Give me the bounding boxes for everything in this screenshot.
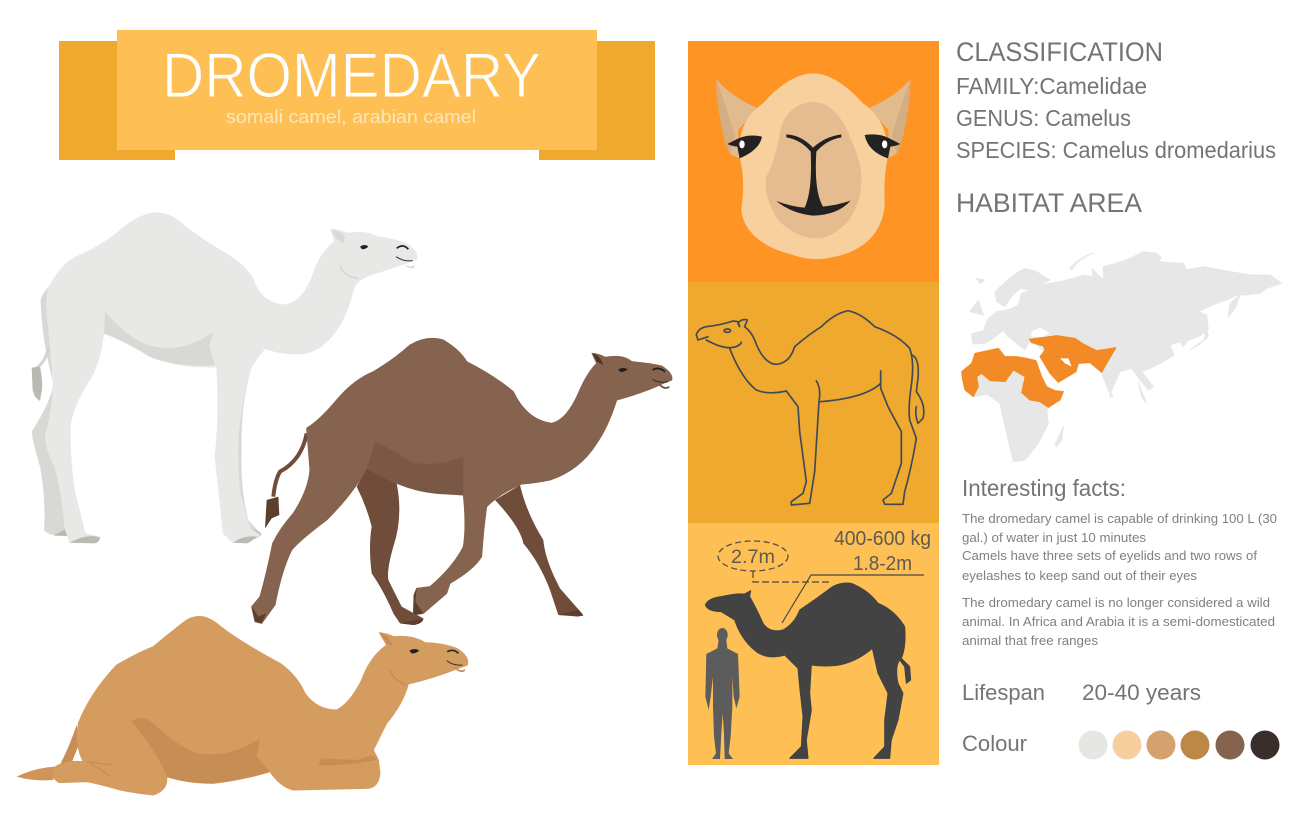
fact: domestication [962, 596, 1275, 648]
lifespan: Lifespan [962, 680, 1045, 705]
fact: eyelids [962, 549, 1258, 583]
title banner [59, 30, 655, 160]
icon: camel line drawing [696, 311, 924, 505]
Africa landmass [963, 370, 1063, 462]
lifespan: 20-40 years [1082, 680, 1201, 705]
fact: drinking: gal.) of water in just 10 minutes [962, 531, 1146, 545]
colour swatches: Colour [962, 731, 1027, 756]
fact: domestication: The dromedary camel is no longer considered a wild [962, 596, 1270, 610]
illustration: white standing camel [32, 213, 417, 543]
fact: drinking: The dromedary camel is capable of drinking 100 L (30 [962, 512, 1277, 526]
weight label: 400-600 kg [834, 528, 931, 550]
range: Middle East [1029, 336, 1116, 382]
family: FAMILY:Camelidae [956, 73, 1147, 99]
Eurasia landmass [970, 252, 1282, 403]
shoulder height guide [782, 575, 924, 623]
total height dashed guide [753, 571, 832, 582]
Persian Gulf [1060, 358, 1072, 367]
colour swatches [962, 730, 1280, 760]
fact: domestication: animal that free ranges [962, 634, 1098, 648]
fact: drinking [962, 512, 1277, 545]
lifespan [962, 680, 1201, 705]
Black Sea [1031, 328, 1050, 337]
genus: GENUS: Camelus [956, 105, 1131, 131]
camel silhouette [705, 583, 911, 758]
shoulder height label: 1.8-2m [853, 553, 912, 575]
heading: interesting facts: Interesting facts: [962, 475, 1126, 501]
panel: camel outline [688, 282, 939, 523]
illustration: tan resting camel [17, 617, 468, 795]
interesting facts [962, 475, 1277, 648]
fact: eyelids: Camels have three sets of eyelids and two rows of [962, 549, 1258, 563]
title: DROMEDARY [162, 41, 541, 111]
fact: eyelids: eyelashes to keep sand out of their eyes [962, 569, 1197, 583]
heading: habitat area: HABITAT AREA [956, 188, 1142, 218]
range: North Africa [962, 348, 1063, 407]
panel: camel face [688, 41, 939, 282]
subtitle: somali camel, arabian camel [226, 107, 476, 127]
total height label [718, 541, 788, 571]
total height label: 2.7m [731, 547, 775, 568]
classification text [956, 37, 1276, 163]
human silhouette [705, 628, 740, 759]
heading: classification: CLASSIFICATION [956, 37, 1163, 67]
illustration: brown walking camel [252, 338, 672, 625]
habitat map [962, 252, 1282, 462]
species: SPECIES: Camelus dromedarius [956, 137, 1276, 163]
fact: domestication: animal. In Africa and Arabia it is a semi-domesticated [962, 615, 1275, 629]
panel: size comparison [688, 523, 939, 765]
icon: camel head [716, 73, 910, 259]
